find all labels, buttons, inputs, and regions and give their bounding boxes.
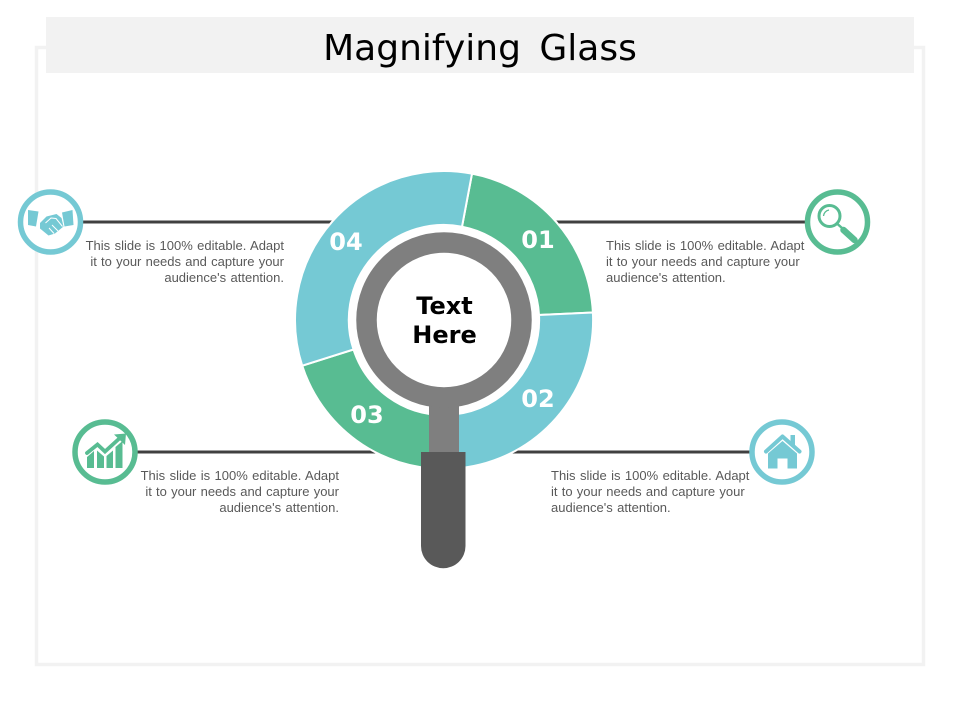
donut chart: [295, 171, 593, 469]
icon: handshake: [20, 192, 80, 252]
center text: Text: [416, 292, 473, 320]
title band: [46, 17, 914, 73]
connector line: bottom left: [135, 450, 380, 454]
text block: top left: it to your needs and capture your: [90, 254, 285, 269]
text block: bottom left: This slide is 100% editable. Adapt: [141, 468, 339, 483]
text block: bottom left: audience's attention.: [219, 500, 339, 515]
label 04: 04: [329, 228, 363, 256]
icon: house: [752, 422, 812, 482]
text block: top left: This slide is 100% editable. Adapt: [86, 238, 284, 253]
icon: growth chart: [75, 422, 135, 482]
connector line: top right: [553, 220, 808, 224]
lens ring: [366, 242, 522, 398]
grip: [421, 452, 466, 568]
center text: Here: [412, 321, 477, 349]
text block: top left: audience's attention.: [164, 270, 284, 285]
slide frame: [36, 48, 924, 664]
text block: bottom right: it to your needs and capture your: [551, 484, 745, 499]
segment 01: [462, 174, 593, 315]
text block: bottom right: This slide is 100% editable. Adapt: [551, 468, 750, 483]
title: Magnifying Glass: [323, 28, 637, 69]
segment 03: [302, 350, 444, 469]
label 02: 02: [521, 385, 555, 413]
segment 02: [444, 312, 593, 469]
magnifying glass: [350, 226, 538, 568]
segment 04: [295, 171, 472, 366]
text block: top right: it to your needs and capture your: [606, 254, 800, 269]
icon: magnifier: [808, 192, 868, 252]
connector line: top left: [80, 220, 335, 224]
label 03: 03: [350, 401, 384, 429]
text block: bottom left: it to your needs and capture your: [145, 484, 340, 499]
neck gap: [429, 400, 459, 455]
text block: top right: audience's attention.: [606, 270, 726, 285]
text block: top right: This slide is 100% editable. Adapt: [606, 238, 805, 253]
label 01: 01: [521, 226, 555, 254]
text block: bottom right: audience's attention.: [551, 500, 671, 515]
connector line: bottom right: [508, 450, 753, 454]
lens white surround: [350, 226, 538, 414]
